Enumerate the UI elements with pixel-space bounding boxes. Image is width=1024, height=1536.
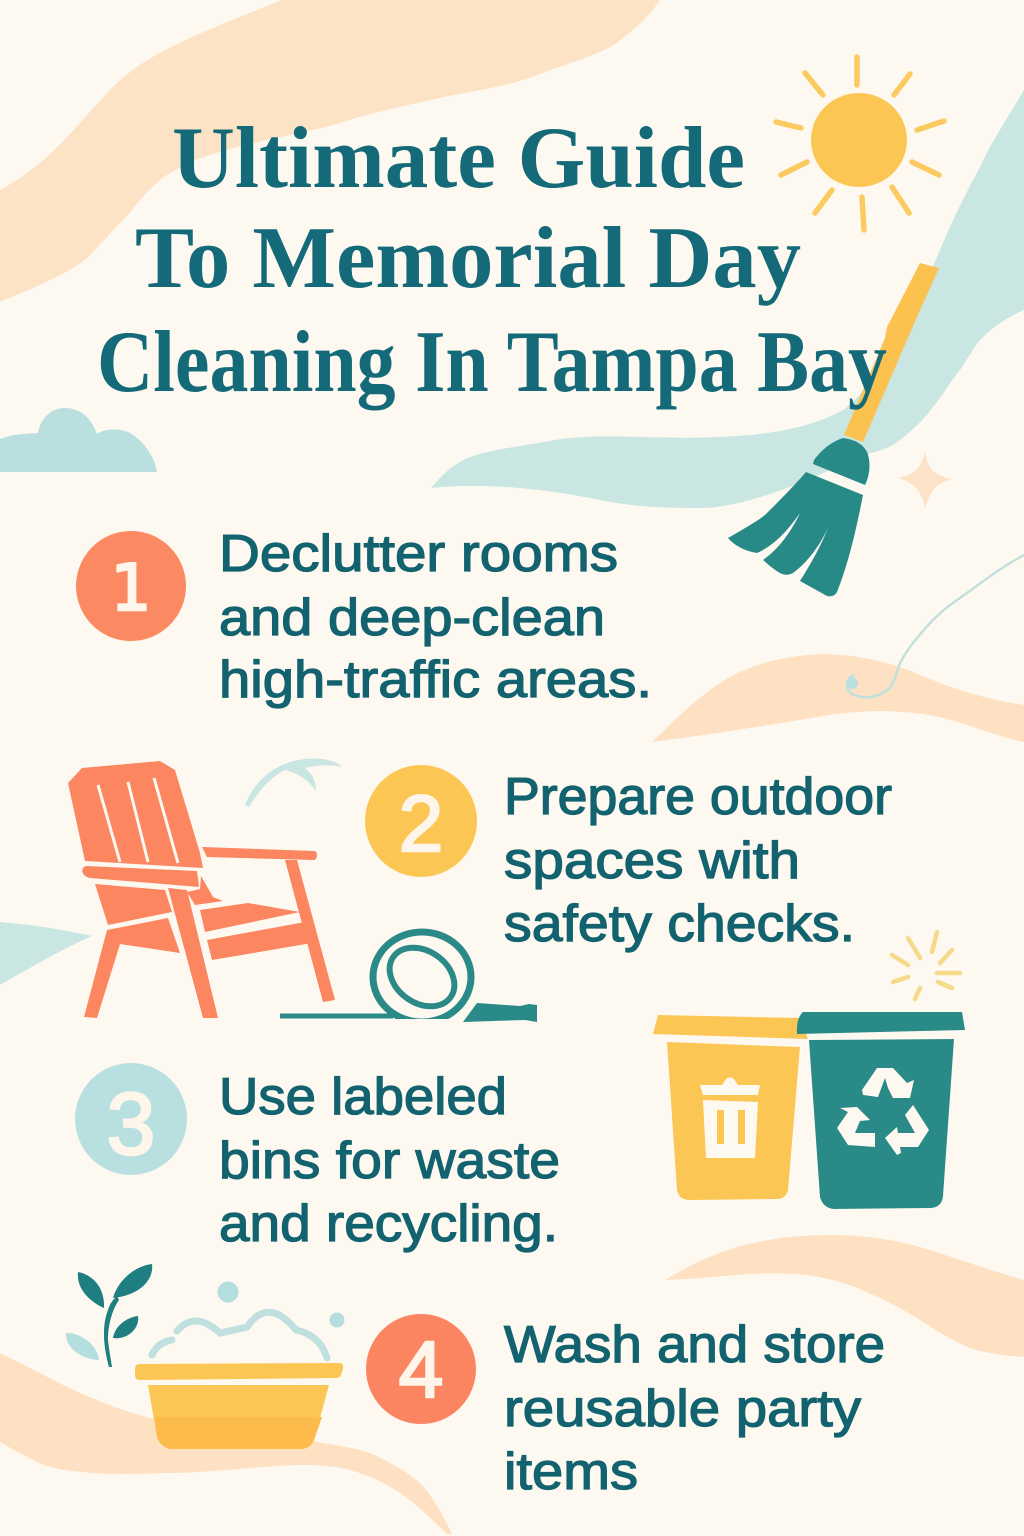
icon: sparkle	[899, 452, 952, 508]
background: lower-right peach wave	[665, 1235, 1024, 1357]
chair lower frame	[84, 918, 180, 1018]
step 1 text	[219, 525, 652, 709]
chair back	[68, 761, 203, 868]
step 1 text: and deep-clean	[219, 589, 605, 647]
step 3 text: bins for waste	[219, 1132, 560, 1190]
step 4 number badge: 4	[399, 1325, 443, 1414]
icon: plant	[66, 1264, 152, 1367]
title: To Memorial Day	[135, 210, 801, 307]
recycle symbol	[837, 1068, 929, 1155]
chair lower back	[95, 884, 172, 925]
step 2 text	[504, 768, 892, 953]
foam	[152, 1312, 327, 1358]
step 2 text: safety checks.	[504, 895, 855, 953]
step 1 number badge	[76, 531, 186, 641]
step 4 text: reusable party	[504, 1380, 861, 1438]
step 3 number badge: 3	[107, 1074, 155, 1173]
broom bristles	[728, 472, 863, 596]
tub rim	[135, 1363, 343, 1380]
chair seat front	[207, 922, 312, 960]
icon: cloud	[0, 408, 157, 472]
background: top peach wave	[0, 0, 660, 302]
icon: outdoor chair	[68, 761, 335, 1018]
icon: garden hose	[280, 932, 537, 1022]
step 3 text: and recycling.	[219, 1195, 558, 1253]
icon: wash tub with foam	[135, 1282, 344, 1449]
icon: sparkle burst	[892, 932, 960, 999]
broom handle	[844, 263, 939, 442]
icon: broom	[728, 263, 939, 596]
icon: sun	[776, 57, 944, 230]
step 3 text: Use labeled	[219, 1068, 507, 1126]
decorative curl line	[846, 555, 1024, 697]
chair seat	[200, 903, 300, 932]
step 1 text: high-traffic areas.	[219, 651, 652, 709]
step 4 number badge	[366, 1314, 476, 1424]
step 1 number badge: 1	[111, 552, 151, 626]
step 2 number badge	[365, 765, 477, 877]
chair arm right	[202, 847, 317, 860]
chair front leg	[168, 888, 218, 1018]
step 4 text: items	[504, 1443, 638, 1501]
step 2 number badge: 2	[399, 779, 443, 868]
background: left teal wedge	[0, 922, 92, 985]
step 2 text: spaces with	[504, 832, 800, 890]
chair back leg	[285, 860, 335, 1002]
broom cap	[813, 438, 869, 485]
background: lower-left peach wave	[0, 1353, 452, 1534]
title: Cleaning In Tampa Bay	[97, 314, 887, 411]
chair arm left	[82, 866, 199, 887]
title	[97, 110, 887, 411]
step 1 text: Declutter rooms	[219, 525, 618, 583]
step 3 number badge	[75, 1063, 187, 1175]
icon: swoosh	[245, 759, 343, 807]
icon: yellow trash bin	[653, 1015, 808, 1200]
step 4 text: Wash and store	[504, 1316, 885, 1374]
icon: teal recycling bin	[797, 1012, 965, 1209]
background: right teal wave	[431, 90, 1024, 508]
background: mid-right peach wave	[652, 654, 1024, 742]
tub body	[148, 1385, 329, 1449]
step 2 text: Prepare outdoor	[504, 768, 892, 826]
step 4 text	[504, 1316, 885, 1501]
trash icon	[700, 1078, 760, 1158]
title: Ultimate Guide	[172, 110, 745, 207]
step 3 text	[219, 1068, 560, 1253]
